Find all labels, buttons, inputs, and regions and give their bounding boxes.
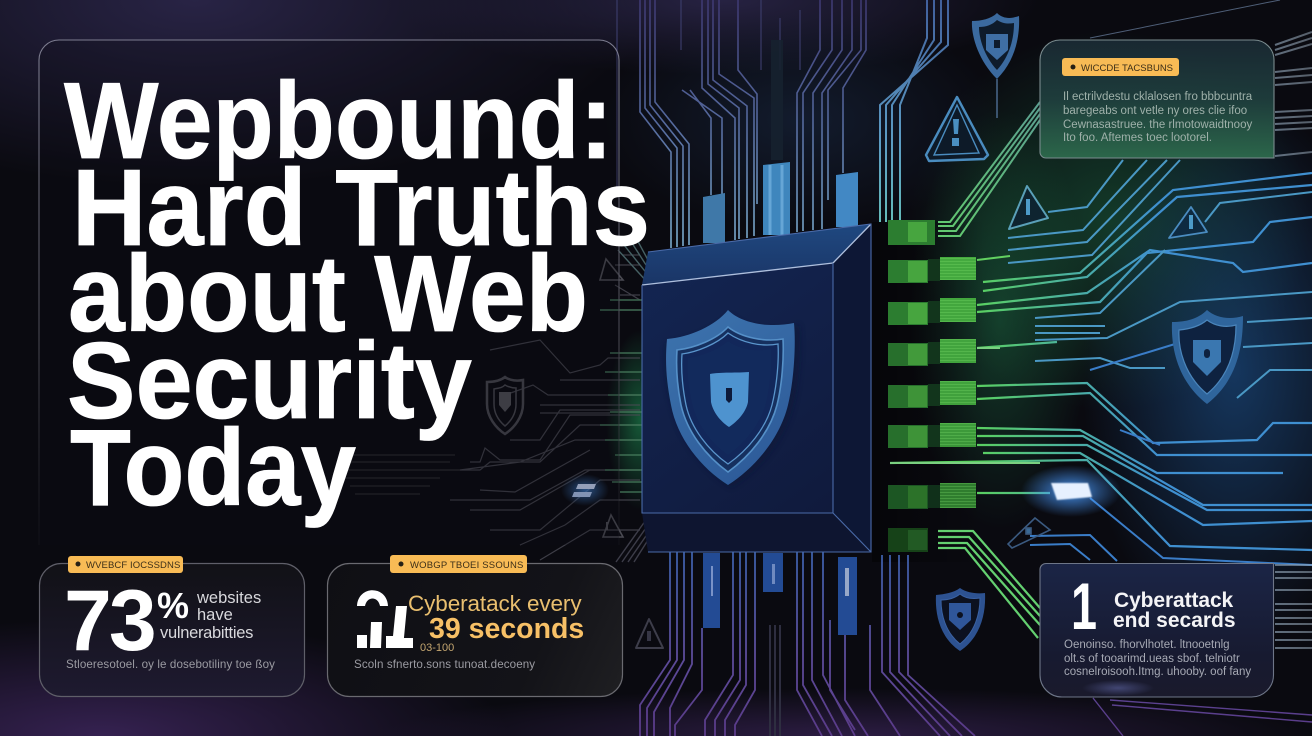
title: about Web — [68, 233, 588, 355]
small caption: 03-100 — [420, 642, 454, 654]
connector row 1 — [888, 220, 935, 245]
connector row 2 — [888, 257, 976, 283]
text block: Ito foo. Aftemes toec lootorel. — [1063, 132, 1212, 144]
stat number: 73 — [64, 573, 154, 669]
text block: baregeabs ont vetle ny ores clie ifoo — [1063, 105, 1247, 117]
icon: warning triangle, mid — [1009, 186, 1048, 229]
panel: top right note — [1040, 40, 1274, 158]
chip: right side — [833, 224, 871, 552]
icon: top shield with stem — [972, 13, 1019, 118]
icon: large shield, right — [1172, 310, 1243, 404]
icon: large warning triangle — [926, 97, 988, 161]
icon: faint warning triangles, left — [600, 259, 623, 537]
description: Oenoinso. fhorvlhotet. ltnooetnlg — [1064, 639, 1230, 651]
stat label: Cyberattack — [1114, 589, 1234, 612]
panel: 73% stat — [40, 556, 304, 696]
glowing node, left — [561, 474, 609, 506]
badge: WICCDE TACSBUNS — [1081, 63, 1173, 74]
icon: bars and arc — [357, 590, 413, 648]
streaks at right edge — [1275, 32, 1312, 648]
badge — [1062, 58, 1179, 76]
text block: Cewnasastruee. the rlmotowaidtnooy — [1063, 119, 1252, 131]
badge — [390, 555, 527, 573]
connector row 3 — [888, 298, 976, 325]
description: cosnelroisooh.Itmg. uhooby. oof fany — [1064, 666, 1251, 678]
chip: bottom bevel — [642, 513, 871, 552]
text block — [1063, 91, 1253, 144]
stat label: websites — [196, 589, 261, 607]
description: Stloeresotoel. oy le dosebotiliny toe ßoy — [66, 658, 275, 671]
central chip — [642, 224, 871, 552]
icon: faint shield, left — [487, 377, 523, 434]
connector row 7 — [888, 483, 976, 509]
badge: WOBGP TBOEI SSOUNS — [410, 560, 524, 571]
icon: warning triangle, right — [1169, 207, 1207, 238]
icon: main shield — [665, 310, 800, 487]
text block: Il ectrilvdestu cklalosen fro bbbcuntra — [1063, 91, 1253, 103]
green connector modules — [888, 220, 976, 552]
title: Hard Truths — [72, 147, 650, 269]
bright node, right — [1021, 465, 1121, 517]
circuit connector blocks: top — [703, 40, 858, 243]
stat label: vulnerabitties — [160, 624, 253, 642]
badge — [68, 556, 183, 573]
connector row 6 — [888, 423, 976, 448]
description: olt.s of tooarimd.ueas sbof. telniotr — [1064, 653, 1240, 665]
circuit traces: top centre — [617, 0, 948, 248]
circuit traces: bottom — [640, 552, 1312, 736]
connector row 8 — [888, 528, 928, 552]
title: Security — [67, 320, 472, 442]
icon: dim triangle, lower right — [1008, 518, 1050, 548]
icon: bottom warning triangle — [636, 619, 663, 648]
stat number: % — [157, 585, 189, 626]
panel: bottom right stat — [1040, 564, 1274, 697]
chip: outlines — [642, 224, 871, 285]
stat value: 39 seconds — [429, 613, 584, 645]
description — [1064, 639, 1251, 678]
title: Today — [70, 407, 356, 529]
connector row 4 — [888, 339, 976, 366]
circuit traces: right, green to blue — [890, 0, 1312, 638]
circuit traces: left, behind title — [340, 236, 648, 562]
stat label: end secards — [1113, 609, 1236, 632]
icon: bottom shield — [936, 588, 985, 651]
stat label — [160, 589, 261, 642]
title — [64, 60, 650, 529]
stat label: have — [197, 606, 233, 624]
connector row 5 — [888, 381, 976, 408]
stat label: Cyberatack every — [408, 591, 582, 616]
panel: title — [39, 40, 650, 545]
title: Wepbound: — [64, 60, 613, 182]
panel: cyberattack every 39 seconds — [328, 555, 622, 696]
chip: front face — [642, 263, 833, 513]
chip: top bevel — [642, 224, 871, 285]
circuit connector blocks: bottom — [703, 553, 857, 635]
stat label — [1113, 589, 1236, 632]
badge: WVEBCF IOCSSDNS — [86, 560, 180, 571]
stat number: 1 — [1071, 569, 1097, 643]
description: Scoln sfnerto.sons tunoat.decoeny — [354, 658, 535, 671]
